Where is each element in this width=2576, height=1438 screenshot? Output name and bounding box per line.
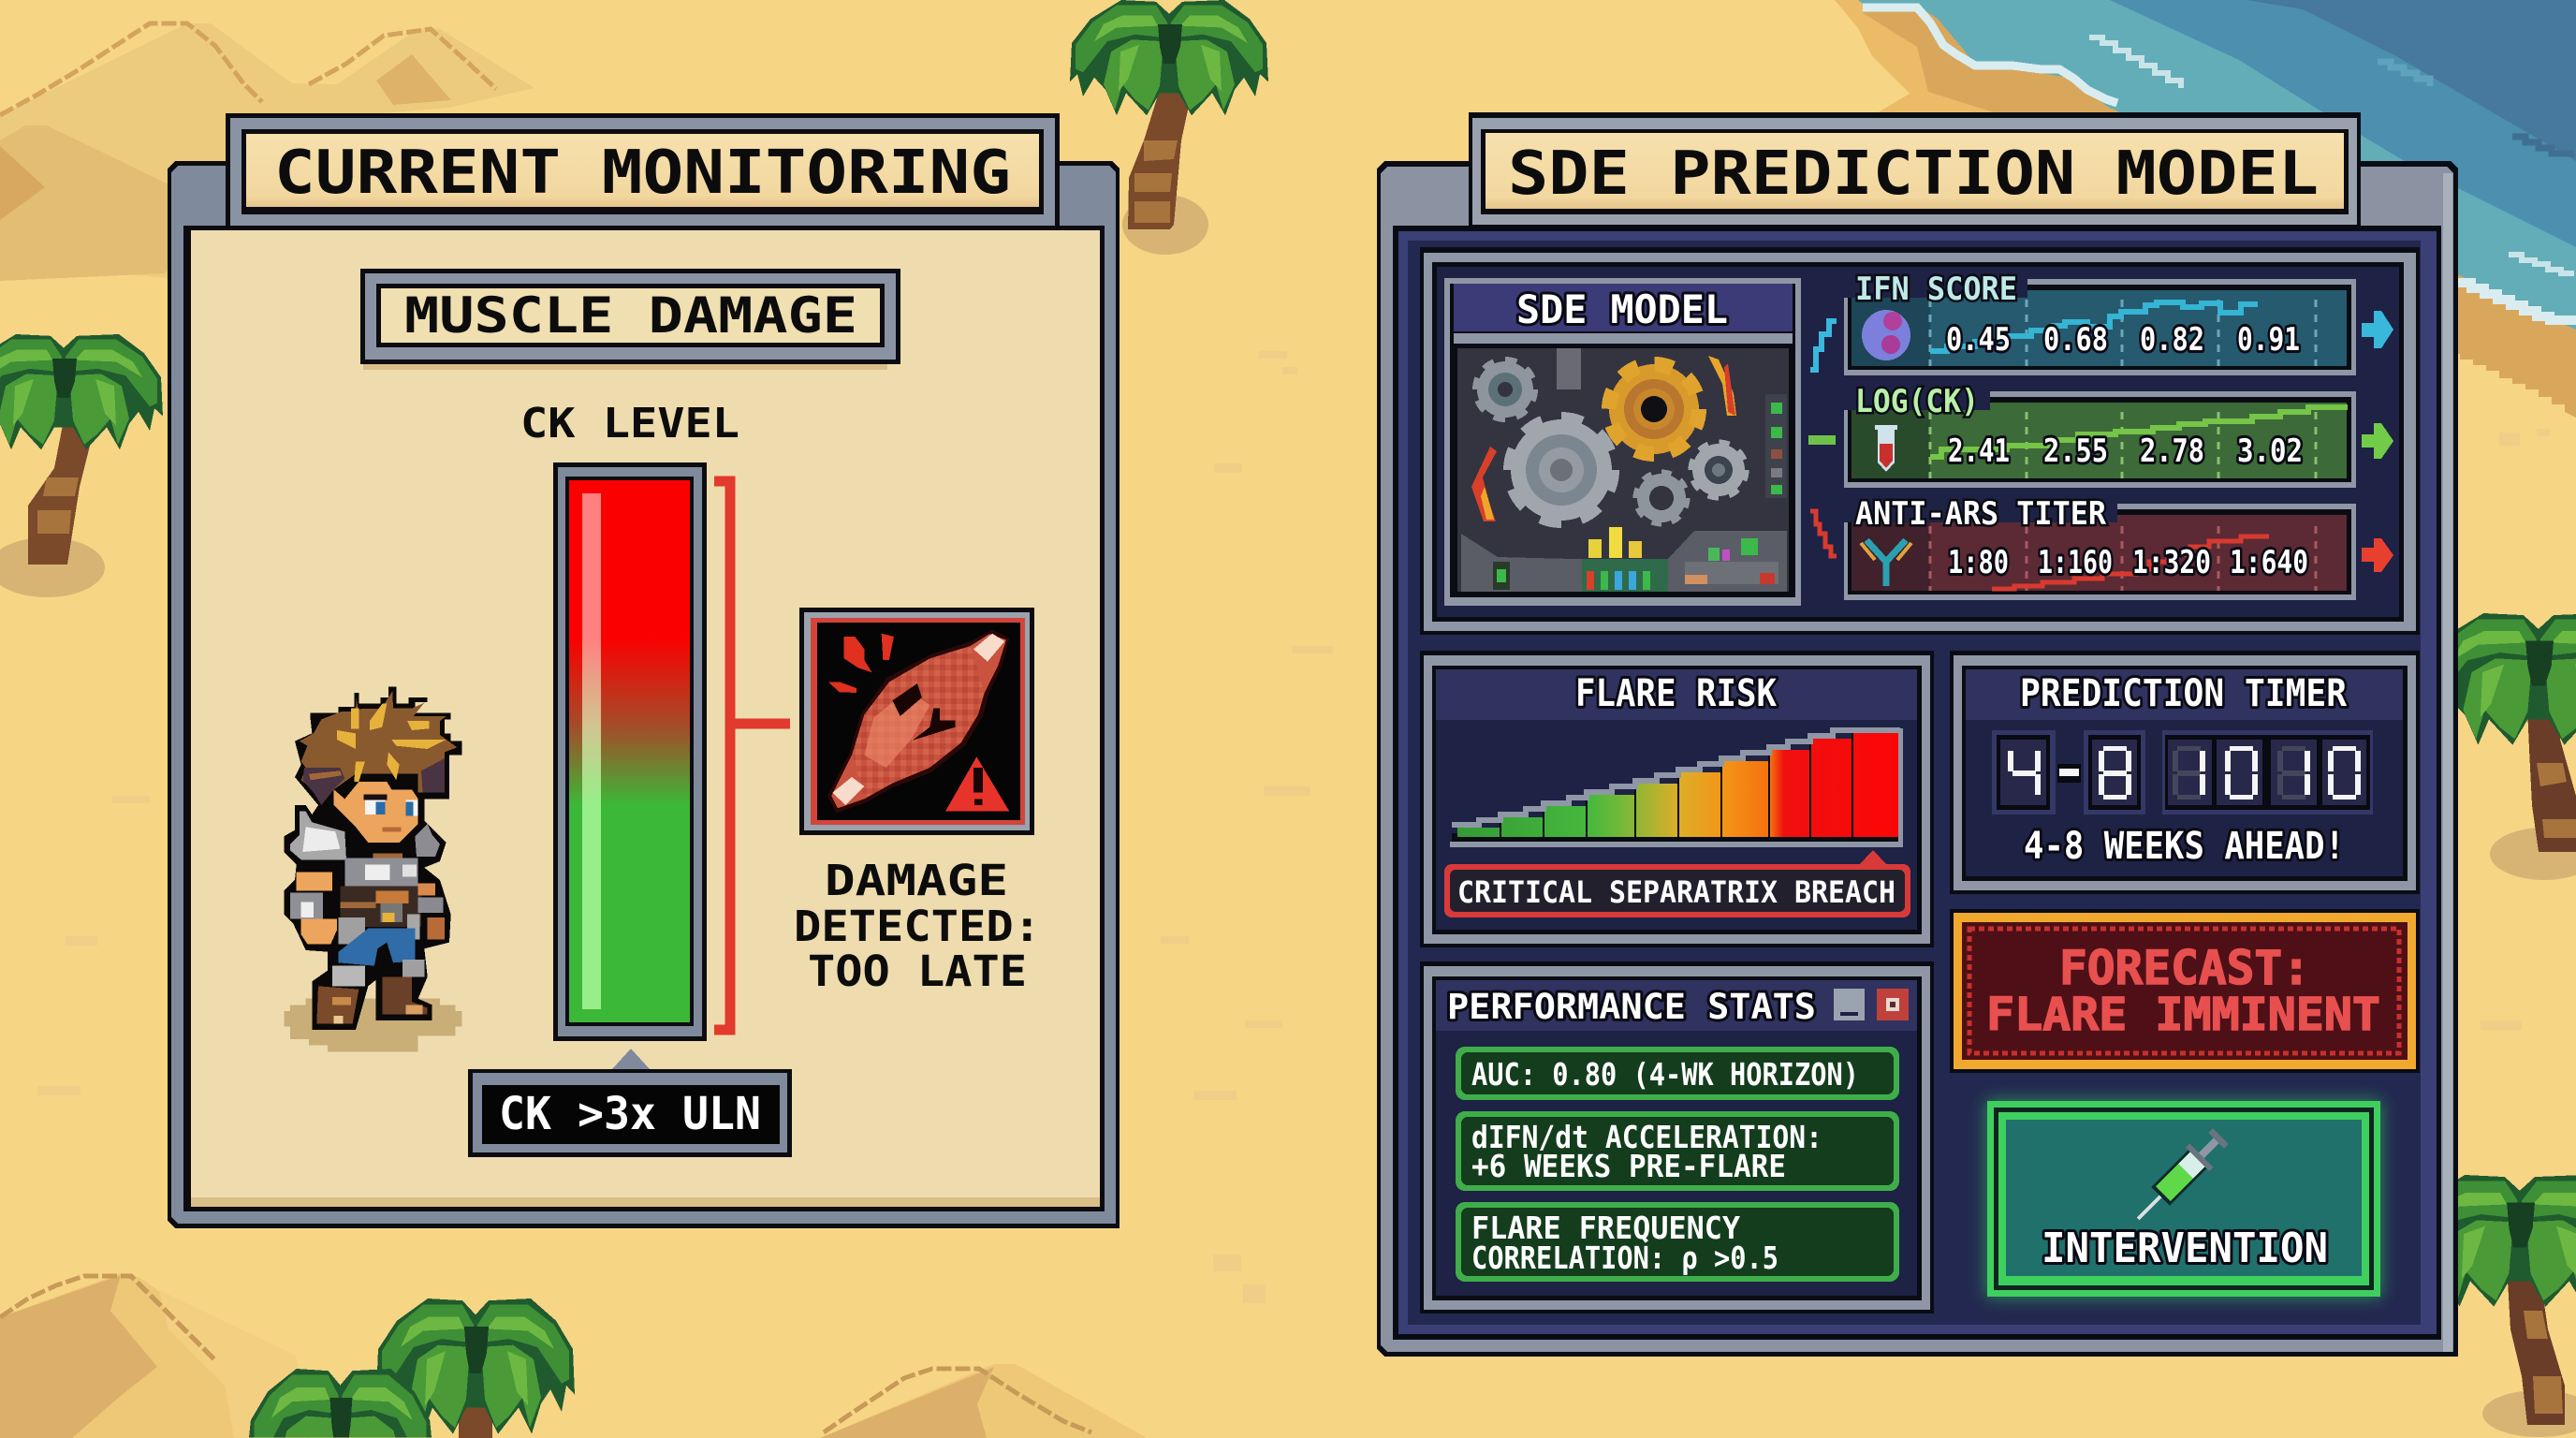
icon: syringe xyxy=(2126,1124,2232,1231)
illustration: gears and machinery xyxy=(1457,348,1789,592)
heading: current monitoring: CURRENT MONITORING xyxy=(274,139,1011,208)
icon: window close button xyxy=(1877,989,1909,1020)
panel: SDE model machine xyxy=(1444,278,1801,606)
label: CK >3x ULN threshold xyxy=(468,1049,792,1157)
character: armored hero sprite xyxy=(284,686,461,1051)
chart row: IFN score: 0.82 xyxy=(2140,321,2204,359)
gear: gold xyxy=(1609,364,1699,454)
panel: prediction timer xyxy=(1950,651,2420,894)
callout: damage detected too late: DETECTED: xyxy=(794,902,1041,951)
stat: AUC: AUC: 0.80 (4-WK HORIZON) xyxy=(1471,1056,1859,1093)
heading: muscle damage: MUSCLE DAMAGE xyxy=(404,287,857,345)
stat: flare frequency correlation: FLARE FREQUENCY xyxy=(1471,1210,1740,1246)
chart row: log(CK): 2.41 xyxy=(1948,433,2010,470)
stat: flare frequency correlation xyxy=(1456,1202,1899,1282)
icon: antibody xyxy=(1861,540,1911,586)
button: intervention: INTERVENTION xyxy=(2042,1225,2328,1272)
bracket: CK range to damage xyxy=(714,481,790,1030)
chart row: anti-ARS titer: 1:640 xyxy=(2230,544,2308,581)
palm tree: right bottom xyxy=(2406,1175,2576,1437)
chart row: anti-ARS titer: 1:80 xyxy=(1948,544,2009,581)
panel: current monitoring xyxy=(168,113,1120,1228)
chart row: log(CK) xyxy=(1808,383,2393,488)
panel: flare risk: FLARE RISK xyxy=(1575,672,1777,715)
banner: forecast flare imminent xyxy=(1950,909,2420,1073)
callout: damage detected too late: DAMAGE xyxy=(825,856,1008,905)
panel: prediction timer: PREDICTION TIMER xyxy=(2020,672,2348,715)
gear: small right xyxy=(1692,444,1745,496)
palm tree: top center xyxy=(1070,0,1268,255)
chart row: anti-ARS titer xyxy=(1810,495,2393,600)
background: dune bottom center xyxy=(820,1364,1147,1438)
badge: critical separatrix breach: CRITICAL SEPARATRIX BREACH xyxy=(1457,874,1895,910)
panel: biomarker and model module xyxy=(1420,247,2420,635)
chart row: IFN score: IFN SCORE xyxy=(1855,271,2017,308)
chart row: IFN score: 0.91 xyxy=(2237,321,2300,359)
stat: dIFN/dt acceleration: dIFN/dt ACCELERATION: xyxy=(1471,1119,1822,1155)
header: SDE model: SDE MODEL xyxy=(1516,286,1728,332)
header: SDE model xyxy=(1454,284,1793,344)
panel: flare risk xyxy=(1420,651,1934,947)
panel: prediction timer: 4-8 WEEKS AHEAD! xyxy=(2024,825,2345,868)
palm tree: left xyxy=(0,334,163,597)
heading: SDE prediction model xyxy=(1469,112,2361,229)
stat: flare frequency correlation: CORRELATION: ρ >0.5 xyxy=(1471,1240,1778,1276)
palm tree: right middle xyxy=(2424,613,2576,880)
chart row: log(CK): 3.02 xyxy=(2237,433,2303,470)
callout: damage detected too late xyxy=(794,856,1041,996)
icon: window minimize button xyxy=(1834,989,1865,1020)
chart: rising risk staircase xyxy=(1450,728,1903,847)
icon: damaged muscle xyxy=(799,608,1034,835)
panel: performance stats xyxy=(1420,961,1934,1313)
chart row: log(CK): LOG(CK) xyxy=(1855,383,1979,420)
stat: AUC xyxy=(1456,1047,1899,1100)
label: CK >3x ULN threshold: CK >3x ULN xyxy=(499,1088,761,1140)
heading: SDE prediction model: SDE PREDICTION MODEL xyxy=(1508,139,2319,209)
palm trees: bottom left pair xyxy=(249,1299,575,1438)
chart row: anti-ARS titer: 1:160 xyxy=(2038,544,2113,581)
banner: forecast flare imminent: FLARE IMMINENT xyxy=(1986,989,2380,1041)
gear: top left xyxy=(1477,361,1533,418)
gear: small bottom xyxy=(1637,474,1686,522)
badge: critical separatrix breach xyxy=(1444,850,1910,917)
chart row: IFN score: 0.45 xyxy=(1946,321,2011,359)
chart row: anti-ARS titer: 1:320 xyxy=(2132,544,2211,581)
background: sand specks xyxy=(37,351,2550,1303)
chart row: log(CK): 2.78 xyxy=(2140,433,2204,470)
heading: current monitoring xyxy=(226,113,1060,230)
background: dunes bottom left xyxy=(0,1273,309,1438)
gauge: CK level bar xyxy=(553,462,707,1041)
panel: performance stats: PERFORMANCE STATS xyxy=(1447,987,1816,1027)
icon: blood test tube xyxy=(1875,425,1897,472)
chart row: IFN score: 0.68 xyxy=(2043,321,2108,359)
label: CK level: CK LEVEL xyxy=(520,400,739,448)
background: ocean and shoreline xyxy=(1835,0,2576,418)
chart row: anti-ARS titer: ANTI-ARS TITER xyxy=(1855,495,2106,533)
heading: muscle damage xyxy=(360,269,900,370)
banner: forecast flare imminent: FORECAST: xyxy=(2059,941,2310,995)
button: intervention xyxy=(1986,1100,2381,1298)
stat: dIFN/dt acceleration: +6 WEEKS PRE-FLARE xyxy=(1471,1148,1786,1184)
gear: large gray xyxy=(1511,419,1612,521)
background: dunes top left xyxy=(0,23,534,281)
stat: dIFN/dt acceleration xyxy=(1456,1111,1899,1191)
icon: immune cell xyxy=(1862,310,1910,360)
chart row: log(CK): 2.55 xyxy=(2043,433,2108,470)
chart row: IFN score xyxy=(1810,271,2393,375)
callout: damage detected too late: TOO LATE xyxy=(808,946,1027,996)
panel: SDE prediction model xyxy=(1377,112,2458,1357)
countdown display: 4-8 10:10 xyxy=(1992,730,2373,814)
